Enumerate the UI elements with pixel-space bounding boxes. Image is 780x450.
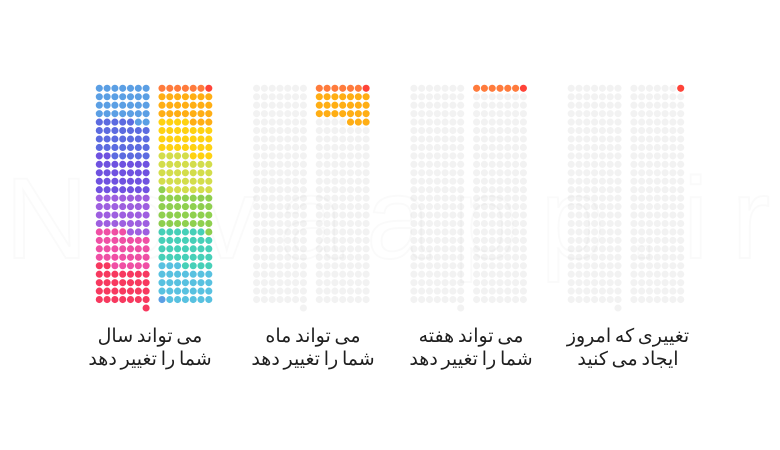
panel: day [566, 88, 689, 370]
label: week: شما را تغییر دهد [409, 349, 533, 370]
label: day: ایجاد می کنید [577, 349, 679, 370]
label: month: می تواند ماه [265, 326, 361, 347]
label: day: تغییری که امروز [566, 326, 689, 347]
label: year: می تواند سال [98, 326, 202, 347]
label: year: شما را تغییر دهد [88, 349, 212, 370]
panel: year [88, 88, 212, 370]
watermark: Novaapp.ir [5, 155, 770, 283]
dot grid: day [571, 88, 681, 309]
panel: month [251, 88, 375, 370]
panel: week [409, 88, 533, 370]
label: week: می تواند هفته [419, 326, 523, 347]
dot grid: month [257, 88, 366, 309]
dot grid: year, 365 coloured dots [99, 88, 209, 308]
label: month: شما را تغییر دهد [251, 349, 375, 370]
dot grid: week [414, 88, 523, 309]
